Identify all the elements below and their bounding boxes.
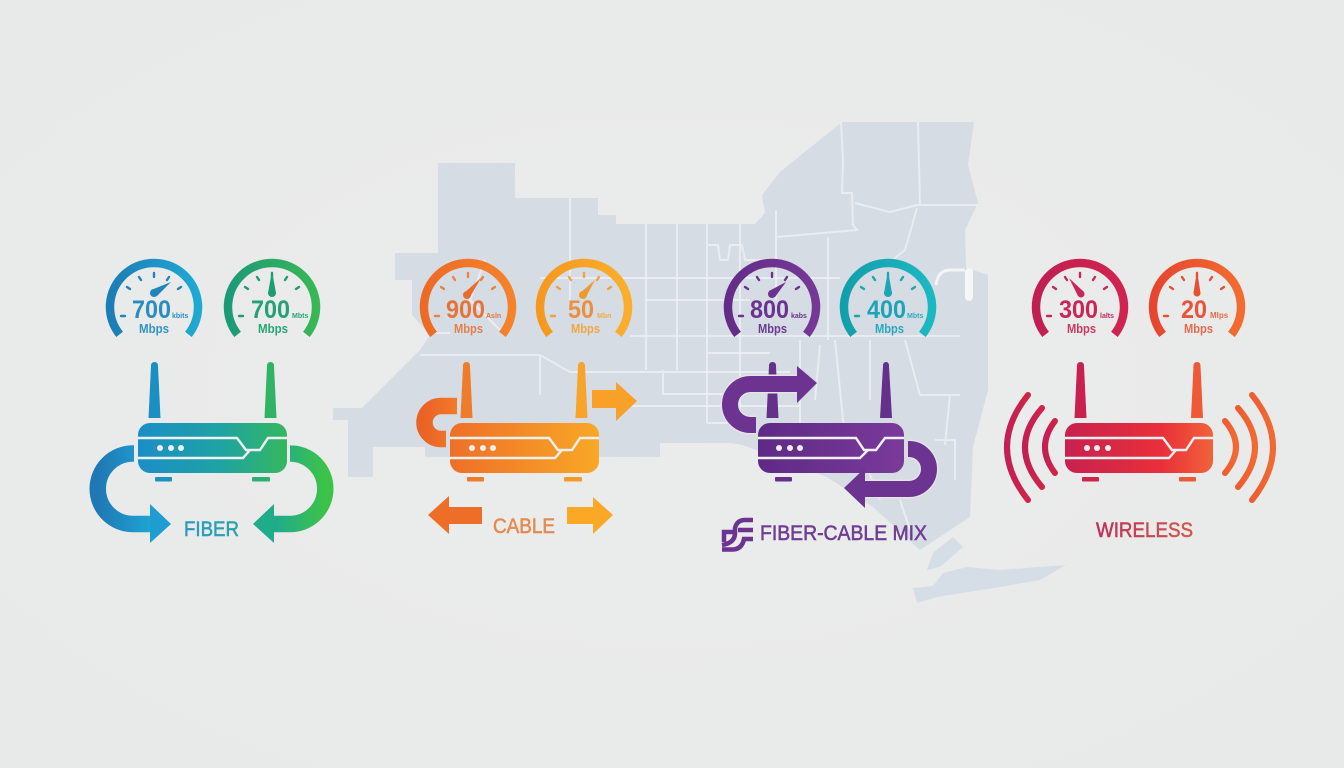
icon: mix router: [758, 362, 904, 482]
gauge: cable upload: 50: [568, 296, 594, 324]
gauge: mix download: kabs: [791, 313, 807, 320]
gauge: mix download: [728, 263, 816, 336]
gauge: wireless download: lalts: [1100, 313, 1114, 320]
gauge: wireless upload: Mlps: [1210, 311, 1229, 320]
gauge: mix upload: [844, 263, 932, 336]
gauge: cable upload: Mbn: [597, 313, 611, 320]
panel: fiber-cable mix: [722, 263, 932, 550]
panel: fiber: [98, 263, 325, 543]
arrow: cable right: [567, 497, 613, 534]
label: cable: CABLE: [493, 515, 555, 538]
gauge: mix upload: Mbps: [875, 322, 904, 336]
gauge: wireless upload: [1153, 263, 1241, 336]
gauge: fiber download: kbits: [172, 313, 188, 320]
gauge: fiber upload: Mbps: [258, 322, 288, 336]
gauge: mix upload: Mbts: [907, 313, 923, 320]
gauge: fiber download: Mbps: [139, 322, 169, 336]
map road lines: [420, 122, 978, 530]
map of the region: [333, 122, 1066, 603]
gauge: cable download: [424, 263, 512, 336]
icon: wireless waves right: [1225, 395, 1273, 500]
arrow: fiber left: [98, 454, 171, 543]
arrow: mix bottom: [844, 449, 929, 508]
gauge: mix download: Mbps: [758, 322, 787, 336]
label: wireless: WIRELESS: [1096, 519, 1193, 542]
gauge: fiber upload: 700: [251, 296, 290, 324]
gauge: fiber download: 700: [132, 296, 171, 324]
gauge: fiber download: [110, 263, 198, 336]
label: fiber: FIBER: [184, 518, 239, 541]
icon: cable router: [450, 362, 599, 482]
gauge: mix upload: 400: [867, 296, 906, 324]
arrow: cable curved: [425, 406, 457, 439]
arrow: cable up right: [592, 382, 637, 421]
icon: wireless router: [1065, 362, 1213, 482]
gauge: cable upload: [540, 263, 628, 336]
gauge: wireless download: Mbps: [1067, 322, 1096, 336]
gauge: cable upload: Mbps: [571, 322, 600, 336]
gauge: cable download: Mbps: [454, 322, 483, 336]
gauge: fiber upload: Mbts: [292, 313, 308, 320]
panel: wireless: [1007, 263, 1273, 542]
gauge: wireless upload: Mbps: [1184, 322, 1213, 336]
arrow: cable left: [428, 496, 482, 534]
panel: cable: [424, 263, 637, 538]
gauge: wireless download: 300: [1059, 296, 1098, 324]
gauge: cable download: Asln: [486, 313, 501, 320]
arrow: fiber right: [253, 454, 325, 543]
map white blob: [936, 270, 965, 285]
gauge: wireless upload: 20: [1181, 296, 1207, 324]
icon: fiber router: [138, 362, 287, 482]
icon: mix symbol: [722, 520, 753, 550]
gauge: wireless download: [1036, 263, 1124, 336]
gauge: mix download: 800: [750, 296, 789, 324]
label: mix: FIBER-CABLE MIX: [760, 522, 927, 545]
gauge: cable download: 900: [446, 296, 485, 324]
arrow: mix top: [730, 366, 817, 425]
gauge: fiber upload: [228, 263, 316, 336]
icon: wireless waves left: [1007, 395, 1055, 500]
